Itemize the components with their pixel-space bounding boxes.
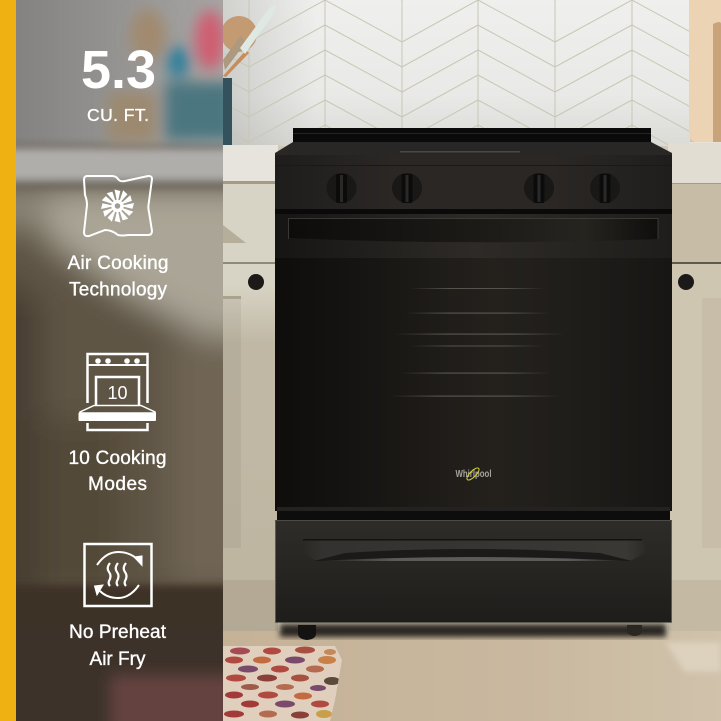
- control knobs: [326, 173, 620, 203]
- floor: [223, 631, 721, 721]
- label: air cooking technology: [68, 253, 168, 300]
- feature: air cooking technology: [68, 176, 168, 300]
- capacity unit: CU. FT.: [87, 105, 149, 125]
- label: air cooking technology: Air Cooking: [68, 253, 168, 274]
- rug: [223, 646, 345, 721]
- feet: [298, 625, 316, 640]
- storage drawer: [275, 520, 672, 622]
- icon: air cooking fan: [84, 176, 152, 236]
- icon: oven: 10: [107, 383, 128, 403]
- door handle: [288, 218, 658, 242]
- backguard: [293, 128, 651, 143]
- door band: [275, 214, 672, 258]
- cabinets: [223, 184, 278, 584]
- countertop: [223, 145, 278, 181]
- soft lit and shaded cabinet areas: [16, 184, 223, 586]
- cabinet knobs: [248, 274, 264, 290]
- blurred utensils and rug: [108, 9, 235, 721]
- label: 10 cooking modes: Modes: [88, 474, 147, 495]
- icon: air fry circulation: [84, 544, 152, 606]
- capacity number: 5.3: [81, 40, 156, 100]
- drawer handle: [303, 539, 647, 561]
- panel: blurred feature sidebar: [16, 0, 223, 721]
- cooktop: [275, 142, 672, 156]
- label: no preheat air fry: Air Fry: [90, 649, 146, 670]
- oven door: [275, 214, 672, 511]
- feature: 10 cooking modes: [68, 354, 166, 495]
- baseboards: [223, 580, 278, 631]
- control panel: [275, 155, 672, 212]
- label: air cooking technology: Technology: [69, 280, 168, 300]
- utensil crock: [221, 5, 276, 145]
- label: no preheat air fry: [69, 622, 167, 670]
- icon: oven: [78, 354, 156, 430]
- whirlpool logo: [456, 466, 492, 482]
- label: no preheat air fry: No Preheat: [69, 622, 167, 643]
- lower vent: [277, 507, 670, 520]
- capacity stat: [81, 40, 156, 125]
- kitchen scene background: [172, 0, 721, 721]
- accent bar: [0, 0, 16, 721]
- blurred counter and wall: [16, 0, 223, 721]
- label: 10 cooking modes: 10 Cooking: [68, 448, 166, 469]
- whirlpool logo: Whirlpool: [456, 469, 492, 480]
- oven racks seen through window: [390, 288, 565, 397]
- tiled backsplash: [223, 0, 690, 146]
- feature: no preheat air fry: [69, 544, 167, 670]
- range appliance: [275, 128, 672, 640]
- label: 10 cooking modes: [68, 448, 166, 495]
- cutting board: [689, 0, 721, 142]
